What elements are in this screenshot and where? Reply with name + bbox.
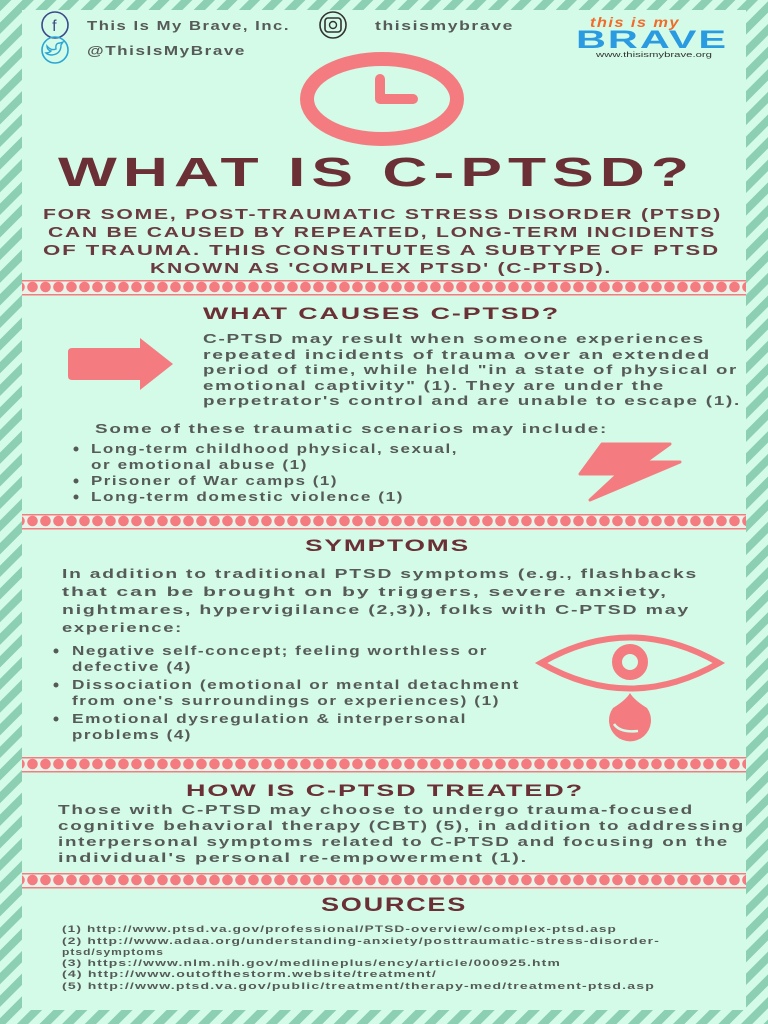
symptoms list: Emotional dysregulation & interpersonal (72, 711, 467, 726)
treatment text: cognitive behavioral therapy (CBT) (5), in addition to addressing (58, 818, 745, 833)
icon: eye (541, 638, 719, 688)
causes text: emotional captivity" (1). They are under the (203, 378, 665, 393)
divider 1 (22, 280, 746, 296)
sources list (62, 924, 660, 992)
intro text: FOR SOME, POST-TRAUMATIC STRESS DISORDER (PTSD) (43, 207, 722, 223)
treatment text: individual's personal re-empowerment (1). (58, 850, 528, 865)
scenarios list: Some of these traumatic scenarios may include: (95, 421, 608, 436)
symptoms intro (62, 566, 698, 635)
sources list: (1) http://www.ptsd.va.gov/professional/PTSD-overview/complex-ptsd.asp (62, 924, 617, 935)
symptoms list: defective (4) (72, 659, 192, 674)
icon: instagram (320, 12, 346, 38)
icon: arrow (68, 338, 173, 390)
symptoms list: from one's surroundings or experiences) (1) (72, 693, 500, 708)
treatment text (58, 802, 745, 865)
divider 4 (22, 873, 746, 888)
heading: causes: WHAT CAUSES C-PTSD? (203, 304, 560, 323)
heading: symptoms: SYMPTOMS (305, 536, 470, 555)
treatment text: Those with C-PTSD may choose to undergo trauma-focused (58, 802, 694, 817)
icon: facebook (42, 12, 68, 38)
scenarios list (74, 421, 608, 504)
symptoms intro: nightmares, hypervigilance (2,3)), folks with C-PTSD may (62, 602, 690, 617)
sources list: (4) http://www.outofthestorm.website/treatment/ (62, 969, 437, 980)
scenarios list: Prisoner of War camps (1) (91, 473, 338, 488)
sources list: ptsd/symptoms (62, 947, 164, 958)
treatment text: interpersonal symptoms related to C-PTSD and focusing on the (58, 834, 729, 849)
scenarios list: Long-term domestic violence (1) (91, 489, 404, 504)
logo (576, 14, 728, 59)
instagram text: thisismybrave (375, 18, 514, 33)
causes text (203, 331, 741, 408)
heading: treatment: HOW IS C-PTSD TREATED? (186, 781, 584, 800)
intro text: KNOWN AS 'COMPLEX PTSD' (C-PTSD). (150, 261, 612, 277)
panel: causes (68, 304, 741, 504)
twitter text: @ThisIsMyBrave (87, 43, 246, 58)
symptoms intro: that can be brought on by triggers, severe anxiety, (62, 584, 668, 599)
icon: clock (307, 59, 457, 139)
sources list: (2) http://www.adaa.org/understanding-anxiety/posttraumatic-stress-disorder- (62, 936, 660, 947)
symptoms list: Dissociation (emotional or mental detachment (72, 677, 520, 692)
causes text: period of time, while held "in a state of physical or (203, 362, 738, 377)
divider 2 (22, 514, 746, 530)
scenarios list: Long-term childhood physical, sexual, (91, 441, 458, 456)
sources list: (5) http://www.ptsd.va.gov/public/treatment/therapy-med/treatment-ptsd.asp (62, 981, 655, 992)
symptoms list: Negative self-concept; feeling worthless or (72, 643, 488, 658)
causes text: perpetrator's control and are unable to escape (1). (203, 393, 741, 408)
social links (42, 12, 514, 63)
symptoms list: problems (4) (72, 727, 192, 742)
logo: BRAVE (576, 26, 728, 54)
causes text: repeated incidents of trauma over an extended (203, 347, 711, 362)
symptoms list (54, 643, 520, 742)
icon: lightning (580, 444, 680, 500)
icon: twitter (42, 37, 68, 63)
facebook text: This Is My Brave, Inc. (87, 18, 290, 33)
title: WHAT IS C-PTSD? (58, 149, 695, 195)
scenarios list: or emotional abuse (1) (91, 457, 308, 472)
intro text: CAN BE CAUSED BY REPEATED, LONG-TERM INCIDENTS (48, 225, 716, 241)
icon: facebook: f (52, 18, 58, 35)
intro text: OF TRAUMA. THIS CONSTITUTES A SUBTYPE OF PTSD (43, 243, 720, 259)
panel: sources (62, 895, 660, 992)
icon: tear drop (609, 693, 651, 741)
causes text: C-PTSD may result when someone experiences (203, 331, 705, 346)
symptoms intro: experience: (62, 620, 183, 635)
intro text (43, 207, 722, 277)
logo: this is my (590, 14, 680, 30)
logo: www.thisismybrave.org (594, 52, 712, 59)
divider 3 (22, 757, 746, 772)
symptoms intro: In addition to traditional PTSD symptoms (e.g., flashbacks (62, 566, 698, 581)
sources list: (3) https://www.nlm.nih.gov/medlineplus/ency/article/000925.htm (62, 958, 561, 969)
panel: treatment (58, 781, 745, 865)
heading: sources: SOURCES (321, 895, 467, 916)
panel: symptoms (54, 536, 719, 742)
